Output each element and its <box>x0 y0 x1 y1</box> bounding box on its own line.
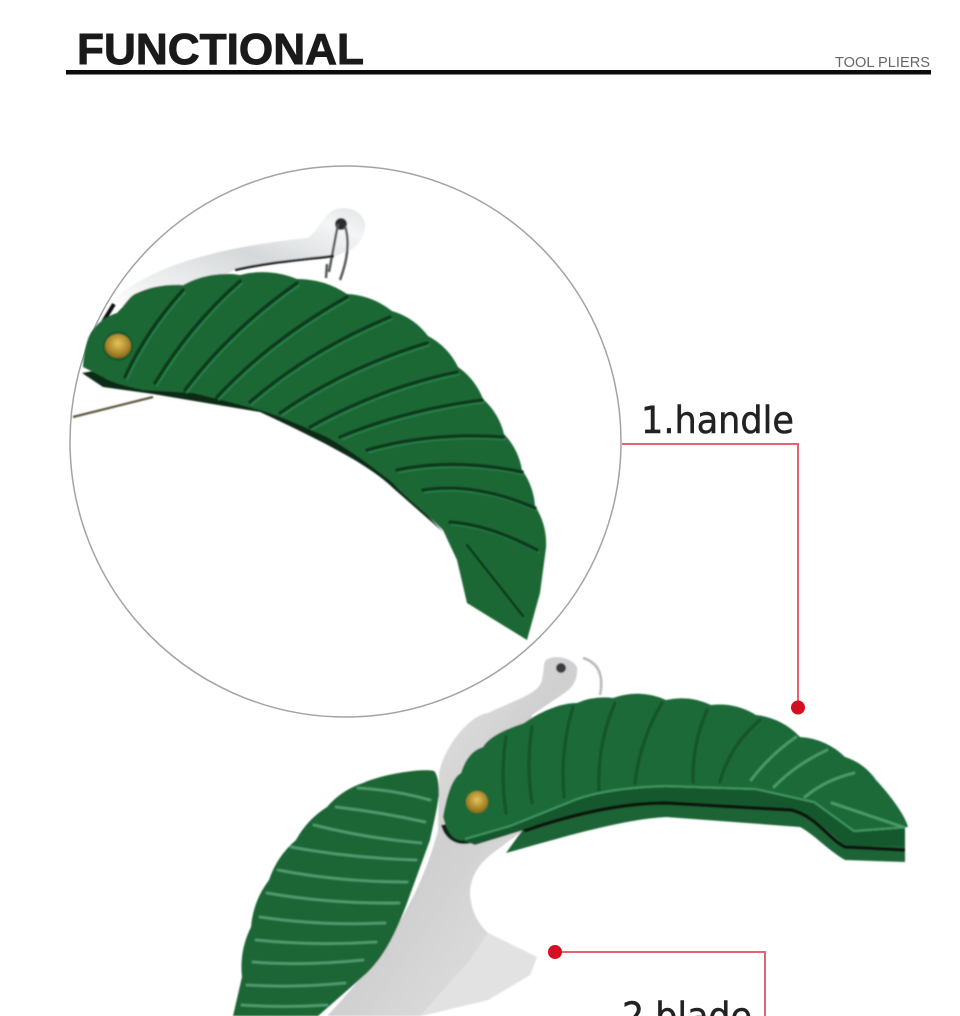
left leaf grooves <box>242 788 430 1006</box>
title: FUNCTIONAL <box>77 25 364 74</box>
callout 2: leader <box>548 945 765 1016</box>
handle side band <box>462 787 905 846</box>
blade <box>327 657 577 1016</box>
callout 1: label: 1.handle <box>641 399 794 442</box>
handle shadow <box>441 815 525 844</box>
enlarged knife detail <box>73 208 546 640</box>
hole <box>335 218 347 230</box>
rivet small <box>466 791 488 813</box>
dark gap between layers <box>524 803 905 850</box>
header rule <box>66 70 931 74</box>
folded knife product <box>233 657 908 1016</box>
keyring small <box>583 658 601 695</box>
leaf front edge highlight <box>465 786 905 839</box>
rivet <box>103 331 133 361</box>
left leaf handle <box>233 770 439 1016</box>
blade bevel <box>420 933 537 1016</box>
upper leaf grooves <box>503 703 760 813</box>
steel tang with hanging hole <box>112 208 365 310</box>
upper leaf handle <box>443 694 908 840</box>
rear handle layer <box>506 798 905 862</box>
upper leaf light grooves <box>751 737 903 827</box>
tang shadow <box>235 256 334 270</box>
subtitle: TOOL PLIERS <box>835 54 930 71</box>
magnifier circle <box>70 166 621 717</box>
blade sliver <box>73 397 153 417</box>
large leaf handle <box>83 272 546 640</box>
hole <box>556 663 566 673</box>
leaf shadow <box>82 368 443 532</box>
leaf groove highlights <box>127 284 539 552</box>
callout 1: leader <box>622 444 805 714</box>
leaf grooves <box>125 281 537 616</box>
keyring <box>326 224 348 280</box>
